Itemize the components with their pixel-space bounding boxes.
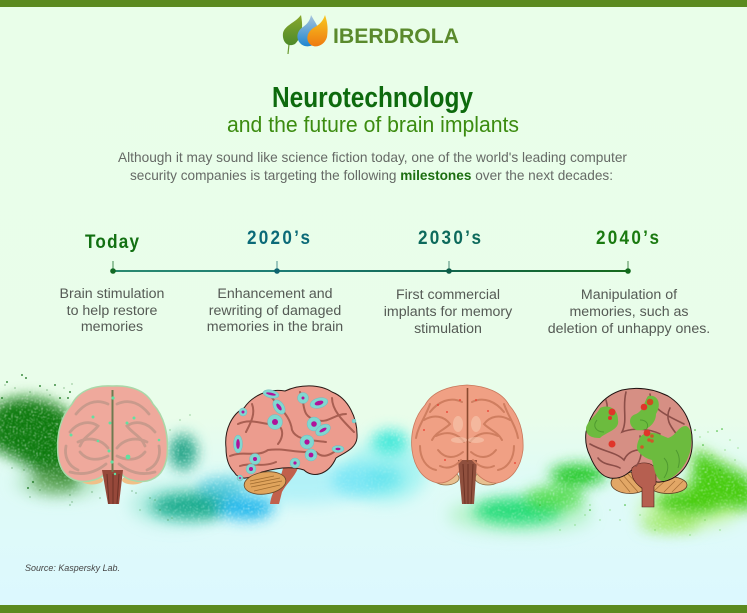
cerebellum lobes [81,476,103,484]
title: Neurotechnology [272,82,473,114]
milestone: 2040's: 2040’s [596,227,659,248]
subtitle: and the future of brain implants [227,112,519,137]
intro text [118,149,627,183]
sulci [230,392,354,466]
source note: Source: Kaspersky Lab. [25,563,120,573]
milestone: 2030's: 2030’s [418,227,481,248]
milestone: 2030's: implants for memory [384,304,513,320]
milestone: 2020's: rewriting of damaged [209,303,341,319]
folds [416,400,518,470]
logo: Iberdrola [283,15,459,54]
milestone: Today: Today [85,231,139,252]
midline fissure [466,388,468,462]
milestone: 2030's [384,227,513,337]
bottom bar [0,605,747,613]
brain stem [102,470,123,504]
milestone: Today: memories [81,319,143,335]
intro text: security companies is targeting the following milestones over the next decades: [130,167,613,183]
brain stem [458,460,477,504]
powder specks [2,375,738,535]
milestone: 2040's: Manipulation of [581,287,677,303]
axis line [113,270,628,272]
cerebellum [243,469,287,497]
milestone: 2020's: Enhancement and [217,286,333,302]
midline fissure [112,390,114,472]
powder clouds [0,375,747,535]
milestone: Today: Brain stimulation [60,286,164,302]
red spots [608,399,654,449]
icon: leaf and flames [283,15,328,54]
cortex [226,386,357,478]
milestone: 2020's [207,227,343,335]
brain 4: rear side view, green affected areas [586,388,692,507]
timeline [60,227,710,337]
milestone: Today [60,231,164,335]
cerebellum lobes [433,471,459,485]
milestone: Today: to help restore [67,303,157,319]
wordmark: IBERDROLA [333,25,459,48]
implant regions [234,388,356,481]
green affected zones [586,396,691,481]
folds [66,402,160,474]
brain stem [632,463,656,507]
milestone: 2040's: memories, such as [569,304,689,320]
green implants [70,396,160,475]
hemispheres [412,385,523,483]
highlights [451,416,484,443]
milestone: 2030's: First commercial [396,287,500,303]
milestone: 2040's [548,227,710,337]
milestone: 2020's: 2020’s [247,227,310,248]
milestone: 2040's: deletion of unhappy ones. [548,321,710,337]
milestone: 2020's: memories in the brain [207,319,343,335]
brain 1: front view, green spots [58,386,167,504]
red implants [423,399,516,464]
brain 2: side view, implanted regions [226,386,357,504]
milestone: 2030's: stimulation [414,321,482,337]
cerebellum [611,472,649,494]
top bar [0,0,747,7]
intro text: Although it may sound like science fiction today, one of the world's leading computer [118,149,627,165]
hemispheres [58,386,167,481]
brain stem [270,468,298,504]
cortex [586,388,692,482]
brain 3: front view, red spots [412,385,523,504]
sulci [590,392,684,468]
